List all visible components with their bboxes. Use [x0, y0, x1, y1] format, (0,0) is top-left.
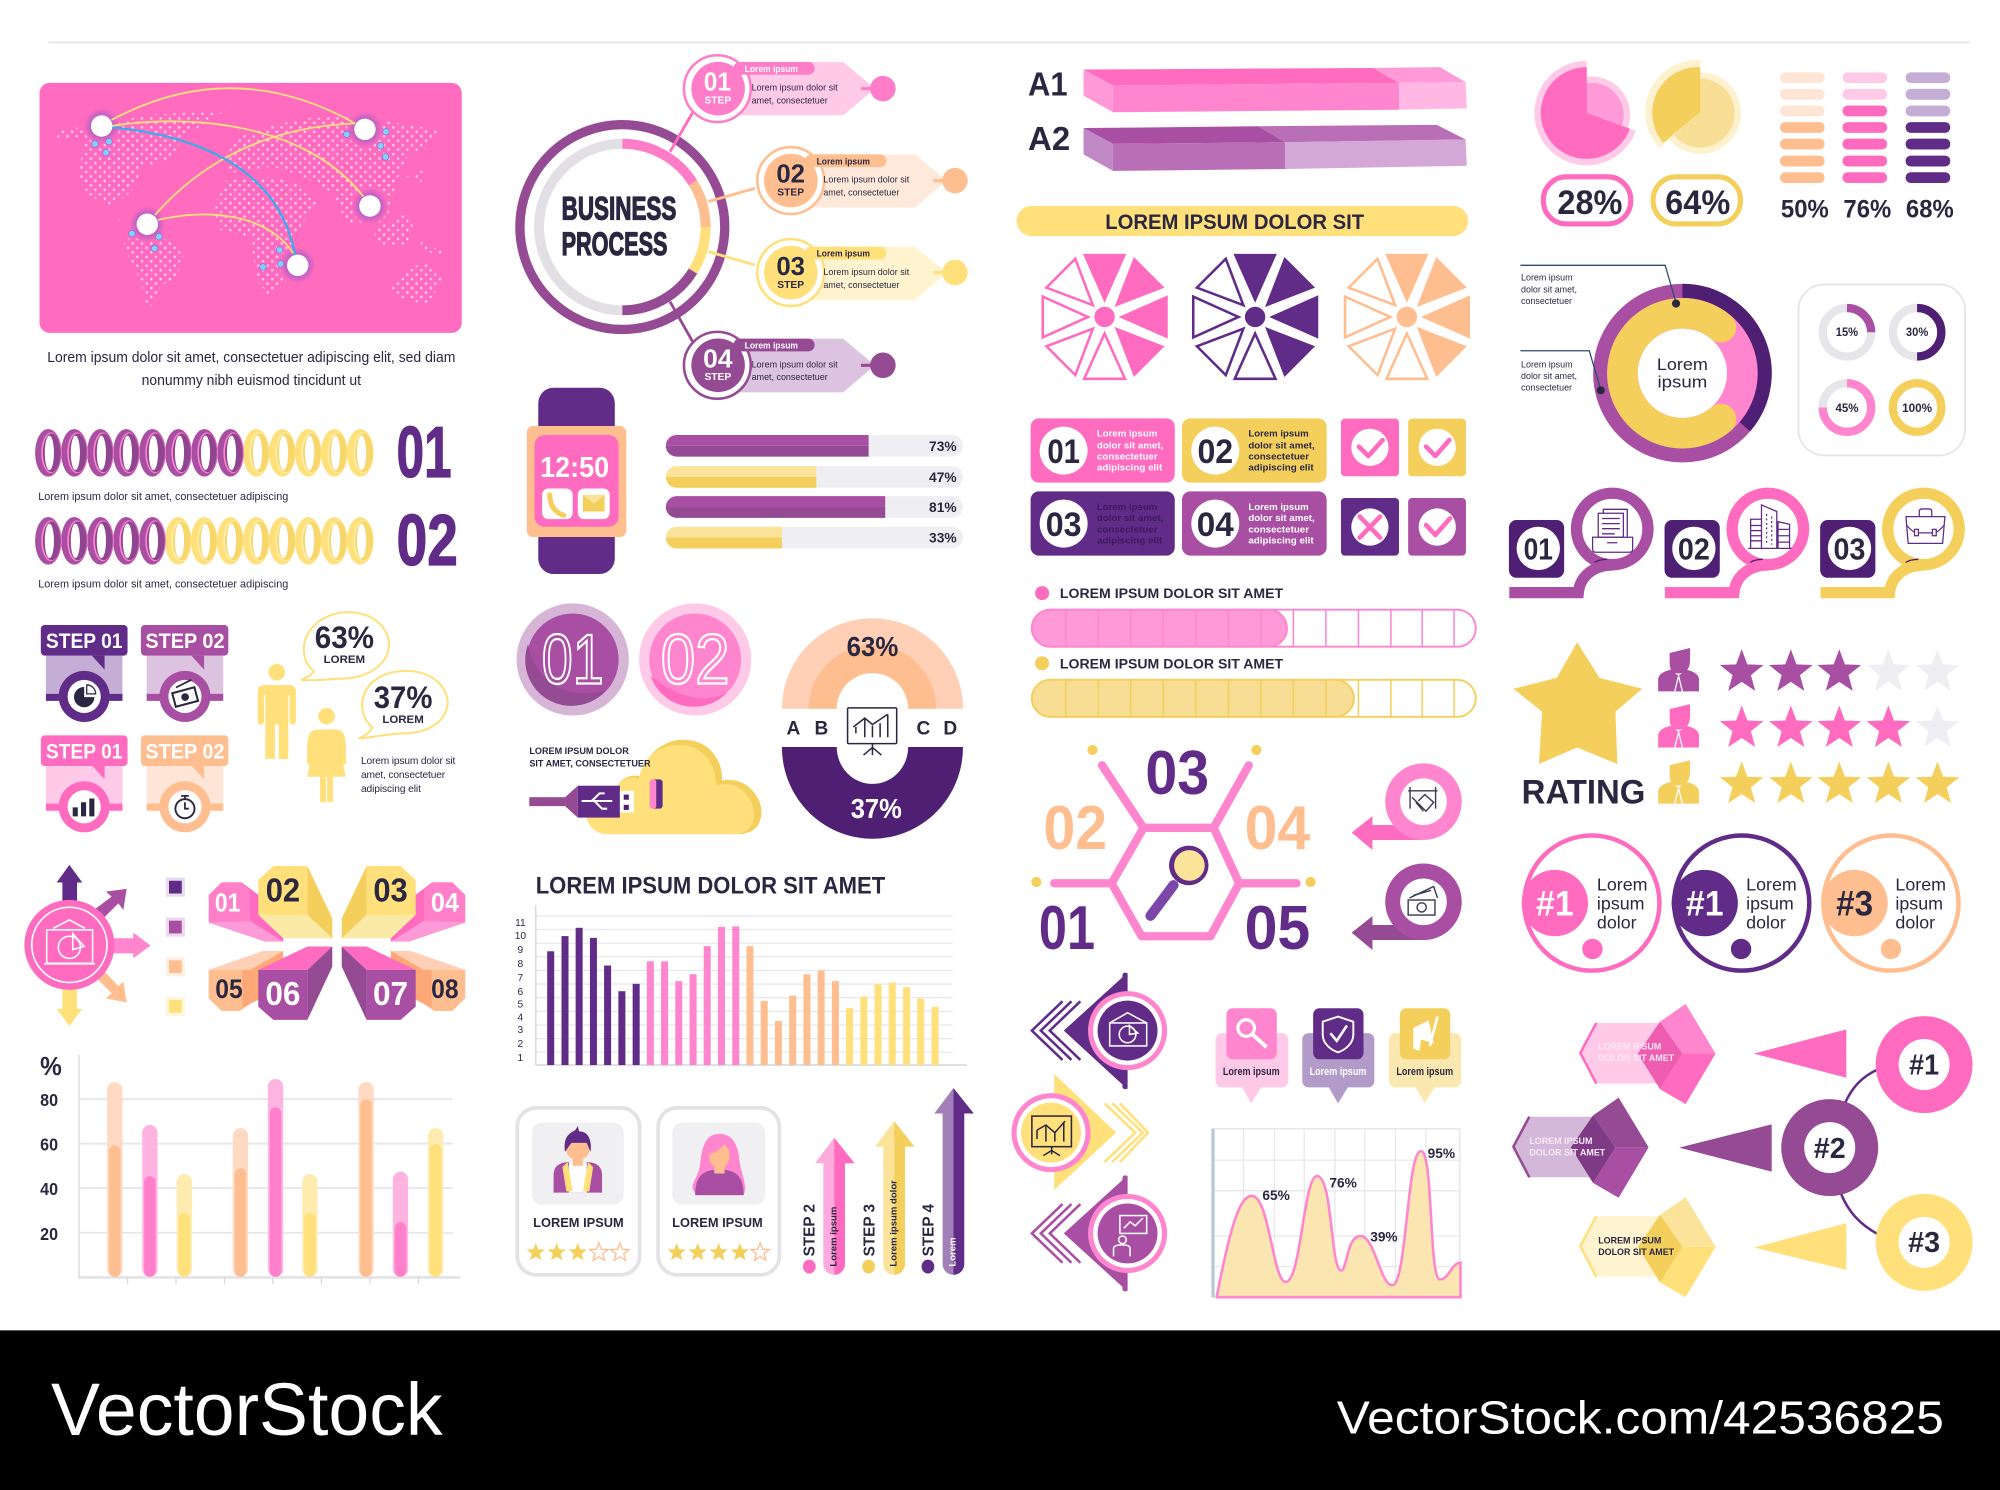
gem arrow: purple [1513, 1098, 1649, 1198]
bar chart: percent rounded columns: 20 [40, 1224, 58, 1244]
block 08: 08 [431, 974, 459, 1004]
map caption: nonummy nibh euismod tincidunt ut [142, 373, 361, 389]
footer band [0, 1330, 2000, 1490]
progress bars: 47% [929, 470, 957, 485]
step 04 callout: Lorem ipsum [745, 341, 798, 351]
rating label: RATING [1522, 774, 1645, 812]
map caption: Lorem ipsum dolor sit amet, consectetuer adipiscing elit, sed diam [47, 350, 455, 366]
3d bar A2: A2 [1028, 121, 1070, 158]
speech bubble 37%: LOREM [382, 714, 424, 726]
bar chart: vertical series: 9 [518, 945, 524, 956]
hub with arrows [24, 865, 151, 1026]
ring progress row 01: Lorem ipsum dolor sit amet, consectetuer adipiscing [38, 491, 288, 503]
speech bubble 37%: 37% [374, 679, 432, 715]
hexagon diagram: 04 [1245, 793, 1310, 863]
gauge: split arch chart: 63% [847, 631, 898, 662]
numbered box 03: adipiscing elit [1097, 536, 1163, 547]
usb caption [529, 746, 651, 769]
rank circle 1 pink: dolor [1597, 913, 1637, 933]
gauge: split arch chart: A [786, 719, 800, 740]
bar chart: vertical series: 2 [518, 1039, 524, 1050]
ring progress row 02 [35, 500, 458, 590]
pin tile: search [1216, 1008, 1288, 1103]
wheel: purple [1193, 254, 1318, 379]
step tab: step 02 violet [141, 625, 228, 722]
arrow: step 4: STEP 4 [921, 1203, 938, 1256]
people caption: adipiscing elit [361, 784, 421, 795]
heading: business process: PROCESS [562, 226, 667, 262]
donut chart: ipsum [1658, 373, 1707, 392]
bar chart: percent rounded columns: 60 [40, 1135, 58, 1155]
pin tile: megaphone [1389, 1008, 1461, 1103]
step 03 callout: Lorem ipsum [817, 249, 870, 259]
gem arrow: pink: DOLOR SIT AMET [1598, 1053, 1674, 1064]
icon: buildings [1748, 505, 1792, 548]
step 04 callout: Lorem ipsum dolor sit [752, 359, 838, 369]
rank circle 2 purple: #1 [1686, 884, 1724, 923]
badge 02: 02 [661, 620, 730, 699]
block 02: 02 [266, 873, 300, 910]
step 03 callout: 03 [776, 253, 805, 281]
step 01 callout: 01 [704, 69, 731, 97]
bar chart: vertical series: 1 [518, 1053, 524, 1064]
bar chart: percent rounded columns: 40 [40, 1179, 58, 1199]
badge 01 [517, 603, 629, 716]
footer band: VectorStock.com/42536825 [1337, 1392, 1944, 1444]
gauges card: 100% [1902, 401, 1932, 415]
pin tile: shield [1302, 1008, 1374, 1103]
gauges card: 45% [1835, 401, 1859, 415]
rank nodes [1781, 1016, 1973, 1291]
gem arrow: pink [1580, 1004, 1716, 1104]
numbered box 03: dolor sit amet, [1097, 513, 1164, 524]
block 02 [258, 866, 332, 938]
gauges card: 30% [1906, 325, 1928, 339]
icon: magnifier [1151, 846, 1209, 916]
numbered box 03 [1031, 491, 1175, 556]
gauge: split arch chart: 37% [851, 793, 902, 824]
rank circle 3 peach: dolor [1895, 913, 1935, 933]
map caption [47, 350, 455, 389]
bar chart: vertical series [515, 906, 967, 1065]
icon callout 03: 03 [1834, 533, 1865, 567]
pill 64% [1653, 177, 1740, 224]
rating row 2 [1658, 704, 1959, 747]
gem arrow: purple: LOREM IPSUM [1529, 1136, 1593, 1147]
arrow: step 3 [861, 1121, 915, 1275]
donut leader labels: dolor sit amet, [1521, 371, 1577, 381]
step 02 callout: amet, consectetuer [823, 188, 899, 198]
profile card 2 [658, 1108, 779, 1275]
stacked pills 68%: 68% [1906, 196, 1954, 224]
block 04: 04 [431, 888, 459, 918]
smartwatch: 12:50 [540, 452, 609, 484]
rank circle 2 purple: ipsum [1746, 893, 1794, 913]
step 01 callout [684, 55, 896, 122]
step 04 callout [684, 332, 896, 399]
step 03 callout: STEP [777, 280, 804, 291]
segmented bar: yellow: LOREM IPSUM DOLOR SIT AMET [1060, 656, 1284, 671]
top rule [48, 41, 1969, 43]
profile card 1: LOREM IPSUM [533, 1215, 624, 1230]
numbered box 02: 02 [1197, 433, 1233, 471]
icon: man [258, 664, 296, 759]
block 07 [342, 947, 416, 1020]
stacked pills 68% [1906, 72, 1954, 224]
ring progress row 01: 01 [397, 412, 452, 493]
badge 01: 01 [542, 620, 604, 699]
rank circle 3 peach [1821, 835, 1959, 971]
segmented bar: pink [1032, 586, 1476, 647]
step tab: step 02 peach: STEP 02 [145, 738, 224, 763]
arrow: step 3: Lorem ipsum dolor [889, 1180, 900, 1267]
dotted continents [57, 110, 442, 310]
block 01: 01 [215, 890, 240, 918]
segmented bar: pink: LOREM IPSUM DOLOR SIT AMET [1060, 586, 1284, 601]
numbered box 03: Lorem ipsum [1097, 502, 1157, 513]
step 03 callout [757, 239, 968, 306]
heading: bar chart title: LOREM IPSUM DOLOR SIT AMET [536, 872, 886, 898]
arrow marker: yellow right [1011, 1074, 1148, 1190]
profile card 1 [517, 1108, 640, 1275]
bar chart: vertical series: 3 [518, 1025, 524, 1036]
step 04 callout: STEP [704, 372, 731, 383]
gauges card [1798, 284, 1965, 455]
3d bar A1 [1028, 67, 1467, 112]
numbered box 02: adipiscing elit [1248, 463, 1314, 474]
numbered box 03: consectetuer [1097, 524, 1158, 535]
usb caption: LOREM IPSUM DOLOR [529, 746, 629, 756]
block 06: 06 [265, 976, 300, 1013]
pin tile: megaphone: Lorem ipsum [1396, 1066, 1453, 1078]
numbered box 01: consectetuer [1097, 451, 1158, 462]
arrow: step 4 [921, 1088, 974, 1275]
icon: document tray [1593, 509, 1633, 552]
donut leader labels: dolor sit amet, [1521, 285, 1577, 295]
ring progress row 02: 02 [397, 500, 458, 581]
3d numbered blocks [209, 866, 465, 1020]
block 05 [209, 951, 283, 1011]
icon: presentation board [848, 708, 897, 755]
icon: person [1658, 648, 1699, 691]
numbered box 04: consectetuer [1248, 524, 1309, 535]
block 07: 07 [373, 976, 408, 1013]
people caption: amet, consectetuer [361, 770, 446, 781]
progress bars: 81% [929, 500, 957, 515]
step 01 callout: Lorem ipsum dolor sit [752, 83, 838, 93]
gauge: split arch chart: C [917, 719, 931, 740]
rating row 1 [1658, 648, 1959, 691]
gem arrow: yellow: LOREM IPSUM [1598, 1236, 1661, 1247]
arrow marker: violet left [1032, 1175, 1167, 1291]
donut chart [1520, 265, 1772, 462]
arrow: step 3: STEP 3 [861, 1204, 878, 1256]
arrow: step 2: Lorem ipsum [829, 1207, 840, 1267]
rank circle 1 pink: #1 [1536, 884, 1574, 923]
heading: business process [562, 190, 676, 262]
donut leader labels: Lorem ipsum [1521, 273, 1573, 283]
donut leader labels: Lorem ipsum [1521, 359, 1573, 369]
progress bars: 73% [929, 439, 957, 454]
step 01 callout: amet, consectetuer [752, 95, 828, 105]
progress bars: 33% [929, 531, 957, 546]
numbered box 03: 03 [1046, 506, 1082, 544]
hexagon diagram: 03 [1145, 738, 1209, 808]
hexagon diagram [1031, 738, 1316, 963]
step 01 callout: Lorem ipsum [745, 64, 798, 74]
bar chart: vertical series: 10 [515, 931, 526, 942]
usb caption: SIT AMET, CONSECTETUER [529, 759, 651, 769]
profile card 2: LOREM IPSUM [672, 1215, 763, 1230]
yellow banner [1017, 206, 1468, 236]
arrow badge: money [1352, 864, 1462, 950]
progress bars [666, 435, 963, 548]
bar chart: vertical series: 8 [518, 959, 524, 970]
3d bar A2 [1028, 121, 1467, 171]
rank circle 3 peach: ipsum [1895, 893, 1943, 913]
pill 64%: 64% [1665, 184, 1730, 222]
step tab: step 02 peach [141, 735, 228, 832]
segmented bar: yellow [1032, 656, 1476, 717]
stacked pills 76% [1842, 72, 1891, 224]
stacked pills 76%: 76% [1843, 196, 1891, 224]
smartwatch [527, 388, 626, 574]
wheel: peach [1345, 254, 1470, 379]
step tab: step 01 pink: STEP 01 [46, 738, 122, 763]
numbered box 01: dolor sit amet, [1097, 440, 1164, 451]
arrow: step 2 [801, 1138, 855, 1275]
yellow banner: LOREM IPSUM DOLOR SIT [1105, 211, 1364, 234]
block 08 [391, 951, 465, 1011]
block 03: 03 [373, 873, 408, 910]
bar chart: percent rounded columns: % [40, 1053, 62, 1081]
gem arrow: pink: LOREM IPSUM [1598, 1042, 1661, 1053]
step 04 callout: amet, consectetuer [752, 372, 828, 382]
arrow: step 2: STEP 2 [801, 1204, 818, 1256]
wheel: pink [1043, 254, 1168, 379]
numbered box 01: 01 [1047, 433, 1080, 471]
avatar: woman [693, 1134, 745, 1195]
pie: pink 28% [1534, 61, 1636, 165]
pin tile: shield: Lorem ipsum [1310, 1066, 1366, 1078]
step tab: step 01 purple: STEP 01 [46, 628, 122, 653]
speech bubble 63% [301, 612, 389, 680]
footer band: VectorStock [51, 1368, 444, 1451]
icon callout 03 [1820, 493, 1959, 593]
block 01 [209, 882, 283, 942]
hexagon diagram: 05 [1245, 893, 1310, 963]
step tab: step 01 pink [41, 735, 128, 832]
badge 02 [639, 603, 751, 716]
step 03 callout: Lorem ipsum dolor sit [823, 267, 910, 277]
area chart: 95% [1428, 1146, 1455, 1161]
numbered box 04: Lorem ipsum [1248, 502, 1309, 513]
area chart: 39% [1370, 1230, 1398, 1245]
legend squares [166, 878, 185, 1016]
pin tile: search: Lorem ipsum [1223, 1066, 1280, 1078]
icon: person [1658, 760, 1699, 804]
cloud and usb [529, 740, 761, 834]
numbered box 02 [1182, 418, 1327, 483]
donut leader labels [1520, 265, 1680, 394]
rank nodes: #1 [1909, 1049, 1939, 1081]
gauge: split arch chart: D [943, 719, 957, 740]
numbered box 04: 04 [1197, 506, 1234, 544]
speech bubble 63%: LOREM [324, 654, 365, 666]
block 06 [258, 947, 332, 1020]
rating row 3 [1658, 760, 1959, 804]
arrow marker: purple left [1032, 973, 1167, 1089]
hexagon diagram: 02 [1043, 793, 1107, 863]
ring progress row 02: Lorem ipsum dolor sit amet, consectetuer adipiscing [38, 578, 288, 590]
arrow badge: handshake [1352, 763, 1462, 850]
bar chart: vertical series: 11 [515, 918, 526, 929]
step 03 callout: amet, consectetuer [823, 280, 899, 290]
hexagon diagram: 01 [1039, 893, 1095, 963]
donut chart: Lorem [1657, 355, 1708, 374]
numbered box 02: consectetuer [1248, 451, 1309, 462]
icon callout 01 [1509, 493, 1648, 593]
gauges card: 15% [1836, 325, 1858, 339]
rank circle 3 peach: #3 [1836, 884, 1873, 923]
rank circle 2 purple: dolor [1746, 913, 1786, 933]
icon callout 01: 01 [1524, 533, 1553, 567]
rank circle 1 pink: ipsum [1597, 893, 1645, 913]
icon: person [1658, 704, 1699, 747]
stacked pills 50%: 50% [1781, 196, 1829, 224]
donut leader labels: consectetuer [1521, 382, 1572, 392]
block 03 [342, 866, 416, 938]
speech bubble 37% [358, 671, 448, 739]
bar chart: percent rounded columns: 80 [40, 1090, 58, 1110]
bar chart: percent rounded columns [40, 1053, 460, 1284]
icon callout 02 [1665, 493, 1804, 593]
gem arrow: yellow [1580, 1197, 1716, 1297]
3d bar A1: A1 [1028, 67, 1068, 104]
step 02 callout [757, 147, 968, 214]
donut leader labels: consectetuer [1521, 296, 1572, 306]
bar chart: vertical series: 7 [518, 973, 524, 984]
pill 28% [1543, 177, 1631, 224]
block 05: 05 [215, 974, 243, 1004]
icon: hub chart [44, 920, 95, 964]
gauge: split arch chart [782, 618, 963, 839]
step 01 callout: STEP [704, 95, 731, 106]
icon callout 02: 02 [1678, 533, 1710, 567]
rank circle 1 pink [1522, 835, 1659, 971]
step 04 callout: 04 [703, 345, 733, 373]
numbered box 04 [1182, 491, 1327, 556]
area chart: 65% [1262, 1188, 1290, 1203]
step tab: step 01 purple [41, 625, 128, 722]
people caption: Lorem ipsum dolor sit [361, 756, 456, 767]
step 02 callout: Lorem ipsum [817, 156, 870, 166]
rank circle 2 purple [1672, 835, 1809, 971]
icon: briefcase [1906, 509, 1945, 543]
block 04 [391, 882, 465, 942]
gauge: split arch chart: B [815, 719, 828, 740]
gem arrow: yellow: DOLOR SIT AMET [1598, 1247, 1674, 1258]
avatar: man [554, 1126, 602, 1193]
rank nodes: #2 [1814, 1133, 1846, 1165]
people caption [361, 756, 456, 795]
check tiles [1341, 419, 1466, 556]
stacked pills 50% [1780, 72, 1829, 224]
gem arrow: purple: DOLOR SIT AMET [1529, 1148, 1605, 1159]
business process diagram [520, 113, 755, 342]
step 02 callout: STEP [777, 188, 804, 199]
pointer triangles [1679, 1029, 1846, 1270]
connection arcs [112, 88, 363, 253]
bar chart: vertical series: 6 [518, 987, 524, 998]
numbered box 02: dolor sit amet, [1248, 440, 1315, 451]
area chart: 76% [1329, 1175, 1357, 1190]
rank circle 3 peach: Lorem [1895, 874, 1946, 894]
pill 28%: 28% [1557, 184, 1622, 222]
big rating star [1513, 642, 1642, 764]
numbered box 01 [1031, 418, 1175, 483]
bar chart: vertical series: 5 [518, 1000, 524, 1011]
speech bubble 63%: 63% [315, 619, 374, 655]
rank nodes: #3 [1908, 1227, 1940, 1259]
rank circle 2 purple: Lorem [1746, 874, 1797, 894]
numbered box 01: adipiscing elit [1097, 463, 1163, 474]
pie: yellow 64% [1645, 60, 1741, 154]
heading: business process: BUSINESS [562, 190, 676, 226]
step tab: step 02 violet: STEP 02 [145, 628, 224, 653]
bar chart: vertical series: 4 [518, 1012, 524, 1023]
numbered box 02: Lorem ipsum [1248, 429, 1309, 440]
icon: woman [307, 708, 346, 802]
numbered box 01: Lorem ipsum [1097, 429, 1157, 440]
ring progress row 01 [35, 412, 452, 503]
rating stars [527, 1243, 629, 1260]
step 02 callout: Lorem ipsum dolor sit [823, 175, 910, 185]
rank circle 1 pink: Lorem [1597, 874, 1648, 894]
arrow: step 4: Lorem [947, 1237, 958, 1267]
area chart [1212, 1129, 1460, 1297]
numbered box 04: dolor sit amet, [1248, 513, 1315, 524]
numbered box 04: adipiscing elit [1248, 536, 1314, 547]
step 02 callout: 02 [776, 161, 805, 189]
rating stars [667, 1243, 769, 1260]
panel: world map [40, 83, 462, 333]
